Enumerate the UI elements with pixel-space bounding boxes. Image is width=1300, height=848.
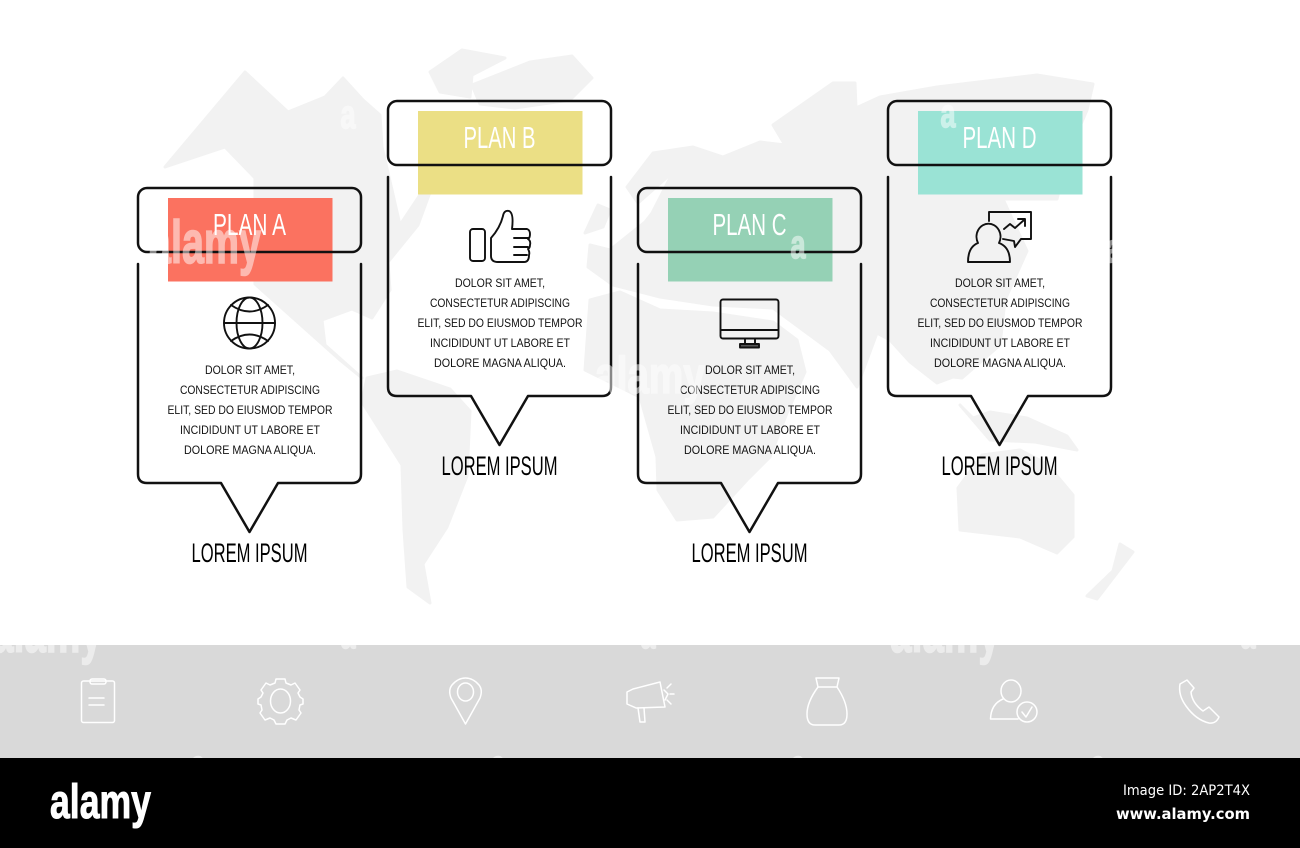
Plan B body text: DOLORE MAGNA ALIQUA. xyxy=(434,358,566,370)
watermark: alamy text overlays: a xyxy=(1240,613,1256,657)
icon: globe xyxy=(224,298,275,348)
watermark: alamy text overlays: a xyxy=(490,743,506,787)
Plan D title: PLAN D xyxy=(962,120,1036,155)
watermark: alamy text overlays: a xyxy=(790,743,806,787)
watermark: alamy text overlays: alamy xyxy=(149,209,261,276)
watermark: alamy text overlays xyxy=(0,92,1256,787)
Plan A body text: CONSECTETUR ADIPISCING xyxy=(180,385,320,397)
card: Plan B xyxy=(388,101,611,481)
Plan B callout outline xyxy=(388,177,611,445)
Plan C body text: INCIDIDUNT UT LABORE ET xyxy=(680,425,820,437)
footer image id: Image ID: 2AP2T4X xyxy=(1123,783,1250,799)
icon: thumbs up xyxy=(470,211,530,262)
band icon: clipboard xyxy=(82,679,114,722)
Plan C body text: CONSECTETUR ADIPISCING xyxy=(680,385,820,397)
Plan D body text: ELIT, SED DO EIUSMOD TEMPOR xyxy=(918,318,1082,330)
Plan D body text: CONSECTETUR ADIPISCING xyxy=(930,298,1070,310)
Plan A body text: DOLOR SIT AMET, xyxy=(205,365,295,377)
Plan C body text: DOLOR SIT AMET, xyxy=(705,365,795,377)
icon band xyxy=(0,645,1300,758)
Plan B title: PLAN B xyxy=(464,120,536,155)
Plan B body text: ELIT, SED DO EIUSMOD TEMPOR xyxy=(418,318,582,330)
card: Plan C xyxy=(638,188,861,568)
Plan A body text: DOLORE MAGNA ALIQUA. xyxy=(184,445,316,457)
Plan C header outline xyxy=(638,188,861,252)
Plan C colour block xyxy=(668,198,832,282)
Plan A body text: INCIDIDUNT UT LABORE ET xyxy=(180,425,320,437)
watermark: alamy text overlays: alamy xyxy=(890,598,1000,665)
band icon: phone xyxy=(1180,680,1219,723)
icon: person with chart xyxy=(968,212,1031,262)
footer bar xyxy=(0,758,1300,848)
Plan D caption: LOREM IPSUM xyxy=(942,451,1058,481)
Plan A callout outline xyxy=(138,264,361,532)
Plan C title: PLAN C xyxy=(712,207,786,242)
card: Plan D xyxy=(888,101,1111,481)
Plan A caption: LOREM IPSUM xyxy=(192,538,308,568)
Plan D body text xyxy=(918,278,1082,370)
band icon: money bag xyxy=(807,678,847,725)
watermark: alamy text overlays: alamy xyxy=(595,347,705,405)
watermark: alamy text overlays: a xyxy=(340,613,356,657)
Plan C body text: DOLORE MAGNA ALIQUA. xyxy=(684,445,816,457)
Plan D callout outline xyxy=(888,177,1111,445)
Plan B body text xyxy=(418,278,582,370)
Plan B body text: CONSECTETUR ADIPISCING xyxy=(430,298,570,310)
Plan A body text xyxy=(168,365,332,457)
band icon: megaphone xyxy=(627,682,674,722)
Plan A title: PLAN A xyxy=(213,207,286,242)
Plan D body text: DOLORE MAGNA ALIQUA. xyxy=(934,358,1066,370)
watermark: alamy text overlays: a xyxy=(1106,227,1121,271)
Plan D header outline xyxy=(888,101,1111,165)
Plan A body text: ELIT, SED DO EIUSMOD TEMPOR xyxy=(168,405,332,417)
Plan B colour block xyxy=(418,111,582,194)
watermark: alamy text overlays: a xyxy=(640,613,656,657)
Plan B header outline xyxy=(388,101,611,165)
footer url: www.alamy.com xyxy=(1116,805,1250,823)
watermark: alamy text overlays: a xyxy=(790,223,806,267)
Plan B caption: LOREM IPSUM xyxy=(442,451,558,481)
band icon: location pin xyxy=(450,678,481,724)
Plan A header outline xyxy=(138,188,361,252)
Plan C body text: ELIT, SED DO EIUSMOD TEMPOR xyxy=(668,405,832,417)
world map background xyxy=(165,50,1133,603)
Plan D body text: INCIDIDUNT UT LABORE ET xyxy=(930,338,1070,350)
watermark: alamy text overlays: a xyxy=(190,743,206,787)
icon: monitor xyxy=(720,300,778,348)
watermark: alamy text overlays: a xyxy=(340,93,356,137)
Plan C body text xyxy=(668,365,832,457)
Plan D body text: DOLOR SIT AMET, xyxy=(955,278,1045,290)
Plan D colour block xyxy=(918,111,1082,194)
Plan B body text: INCIDIDUNT UT LABORE ET xyxy=(430,338,570,350)
watermark: alamy text overlays: a xyxy=(1090,743,1106,787)
Plan B body text: DOLOR SIT AMET, xyxy=(455,278,545,290)
Plan C caption: LOREM IPSUM xyxy=(692,538,808,568)
watermark: alamy text overlays: a xyxy=(940,92,956,136)
band icon: gear xyxy=(258,679,303,724)
footer logo: alamy xyxy=(50,776,151,829)
card: Plan A xyxy=(138,188,361,568)
Plan A colour block xyxy=(168,198,332,282)
Plan C callout outline xyxy=(638,264,861,532)
band icon: user check xyxy=(990,680,1037,722)
